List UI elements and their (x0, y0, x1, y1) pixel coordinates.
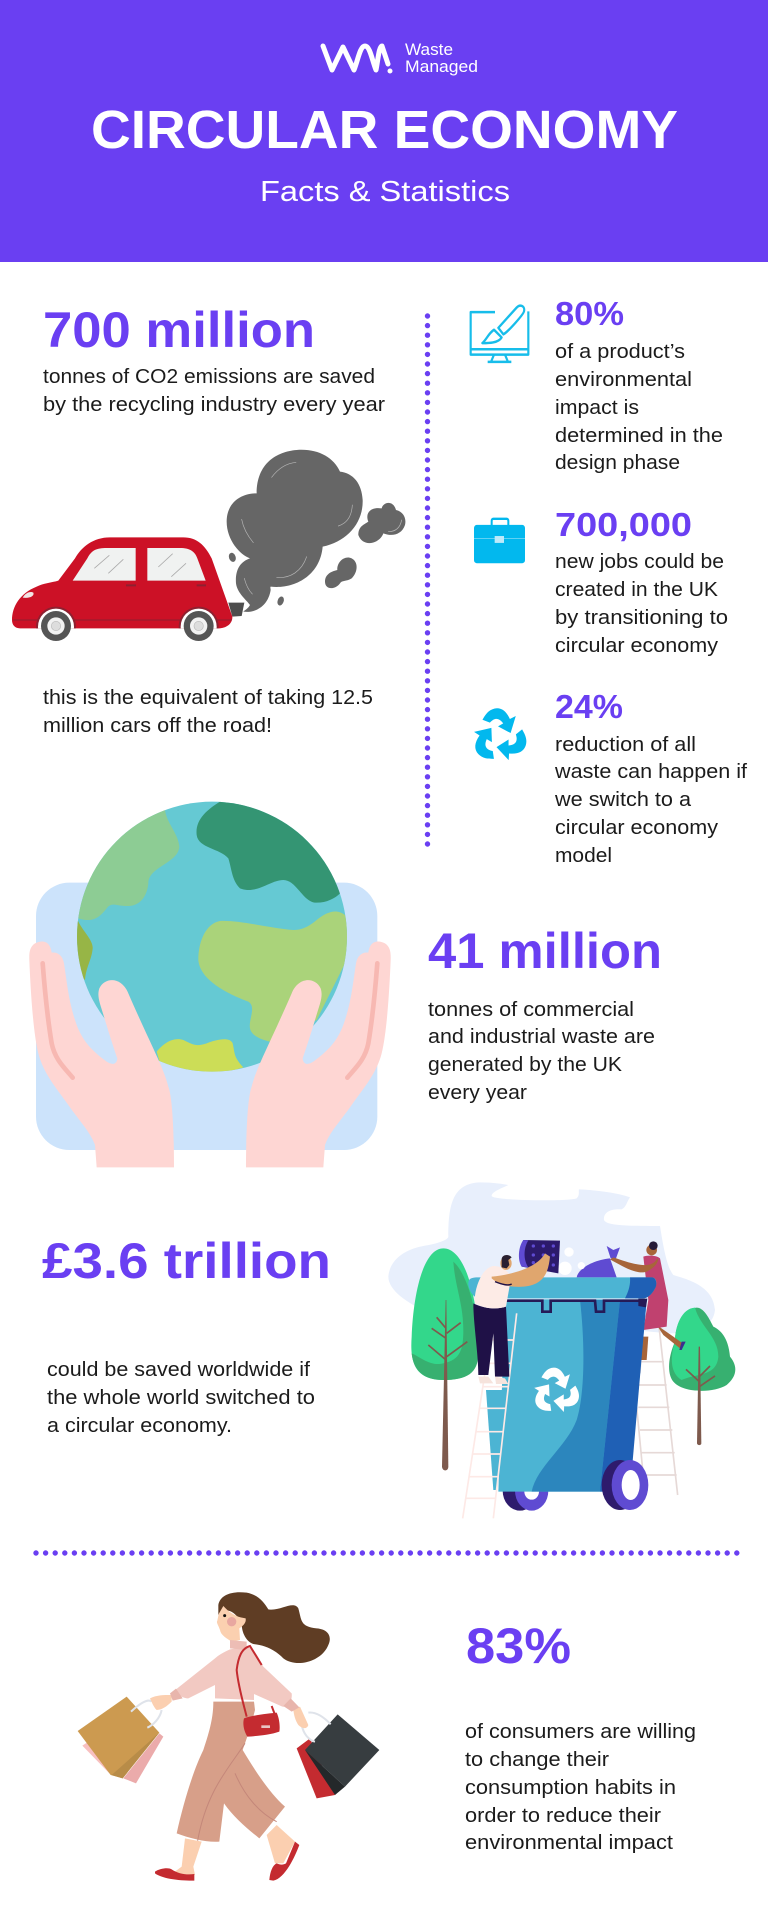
stat heading: 24%: 24% (555, 688, 623, 725)
text block: savings worldwide: a circular economy. (47, 1415, 232, 1437)
text block: design phase: of a product’s (555, 341, 685, 363)
left hand (29, 941, 174, 1167)
shoes (155, 1842, 299, 1881)
text block: new jobs (555, 551, 728, 657)
subtitle: Facts & Statistics (260, 176, 510, 208)
illustration: woman carrying shopping bags (78, 1592, 379, 1881)
icon: monitor with paint brush (471, 306, 528, 362)
text block: commercial waste: generated by the UK (428, 1054, 623, 1076)
stat heading: £3.6 trillion: £3.6 trillion (42, 1233, 331, 1289)
stat heading: 700,000: 700,000 (555, 506, 692, 543)
sweater (170, 1640, 299, 1712)
text block: design phase: impact is (555, 397, 639, 419)
left tree (411, 1248, 478, 1470)
smoke cloud (227, 450, 405, 612)
panel: 700 million tonnes of CO2 (12, 302, 405, 737)
right tree (669, 1308, 735, 1445)
text block: waste reduction (554, 734, 747, 867)
icon: hands holding globe (29, 790, 391, 1167)
logo wordmark: Waste (405, 40, 453, 59)
text block: new jobs: circular economy (555, 635, 718, 657)
text block: consumer habits (465, 1721, 696, 1854)
text block: consumer habits: of consumers are willing (465, 1721, 696, 1743)
text block: cars equivalent: million cars off the road! (43, 715, 272, 737)
text block: commercial waste: and industrial waste are (428, 1026, 655, 1048)
text block: design phase: determined in the (555, 425, 723, 447)
text block: CO2 savings: by the recycling industry every year (43, 394, 385, 416)
face (217, 1606, 246, 1642)
text block: consumer habits: to change their (465, 1749, 609, 1771)
left shopping bags (78, 1697, 163, 1783)
text block: consumer habits: order to reduce their (465, 1805, 661, 1827)
stat heading: 80%: 80% (555, 295, 624, 332)
text block: cars equivalent: this is the equivalent of taking 12.5 (43, 687, 373, 709)
text block: savings worldwide: the whole world switched to (47, 1387, 315, 1409)
trousers (177, 1702, 285, 1842)
text block: CO2 savings: tonnes of CO2 emissions are saved (43, 366, 375, 388)
text block: consumer habits: environmental impact (465, 1832, 673, 1854)
right shopping bags (297, 1713, 379, 1798)
text block: new jobs: created in the UK (555, 579, 719, 601)
hair (218, 1592, 330, 1663)
headlight (23, 592, 34, 598)
panel: 700,000 jobs (474, 506, 728, 657)
icon: white recycle symbol on bin (529, 1368, 584, 1416)
icon: red car with exhaust smoke (12, 450, 405, 647)
text block: waste reduction: we switch to a (554, 789, 692, 811)
text block: new jobs: new jobs could be (555, 551, 724, 573)
stat heading: 83%: 83% (466, 1618, 571, 1674)
text block: design phase: environmental (555, 369, 692, 391)
logo wordmark (405, 40, 478, 76)
panel: 80% design phase (471, 295, 723, 474)
right hand (246, 941, 391, 1167)
icon: briefcase (474, 519, 525, 563)
recycling bin (468, 1277, 656, 1492)
car body (12, 537, 232, 628)
text block: commercial waste (428, 999, 655, 1104)
icon: recycle symbol (467, 708, 532, 765)
panel: 83% of consumers (78, 1592, 696, 1881)
text block: design phase (555, 341, 723, 474)
panel: 24% waste reduction (467, 688, 747, 867)
left bin wheel (503, 1471, 548, 1511)
man lifting box (473, 1240, 560, 1384)
car windows (73, 548, 206, 581)
stat heading: 700 million: 700 million (43, 302, 315, 358)
red handbag (237, 1646, 280, 1737)
text block: waste reduction: reduction of all (555, 734, 696, 756)
text block: savings worldwide (47, 1359, 315, 1437)
panel: £3.6 trillion saved (42, 1182, 735, 1518)
logo wordmark: Managed (405, 57, 478, 76)
woman with bag (577, 1241, 686, 1360)
car wheels (36, 606, 219, 641)
text block: new jobs: by transitioning to (555, 607, 728, 629)
text block: consumer habits: consumption habits in (465, 1777, 676, 1799)
text block: waste reduction: circular economy (555, 817, 718, 839)
light blue backdrop (36, 883, 377, 1150)
text block: commercial waste: tonnes of commercial (428, 999, 634, 1021)
text block: waste reduction: waste can happen if (554, 761, 747, 783)
text block: CO2 savings (43, 366, 385, 416)
right bin wheel (602, 1460, 648, 1510)
skin: legs and hands (150, 1695, 308, 1875)
illustration: people filling recycling bin (388, 1182, 735, 1518)
stat heading: 41 million: 41 million (428, 923, 662, 979)
text block: savings worldwide: could be saved worldwide if (47, 1359, 310, 1381)
title: CIRCULAR ECONOMY (91, 100, 678, 160)
text block: commercial waste: every year (428, 1082, 527, 1104)
exhaust pipe (228, 603, 244, 617)
pale cloud backdrop (388, 1182, 715, 1333)
panel: 41 million tonnes of waste (29, 790, 662, 1167)
left ladder (463, 1313, 517, 1518)
text block: design phase: design phase (555, 452, 680, 474)
text block: waste reduction: model (555, 845, 612, 867)
header banner (0, 0, 768, 262)
white foam (558, 1247, 585, 1275)
text block: cars equivalent (43, 687, 373, 737)
right ladder (637, 1290, 678, 1495)
icon: Waste Managed logo mark (323, 46, 392, 73)
